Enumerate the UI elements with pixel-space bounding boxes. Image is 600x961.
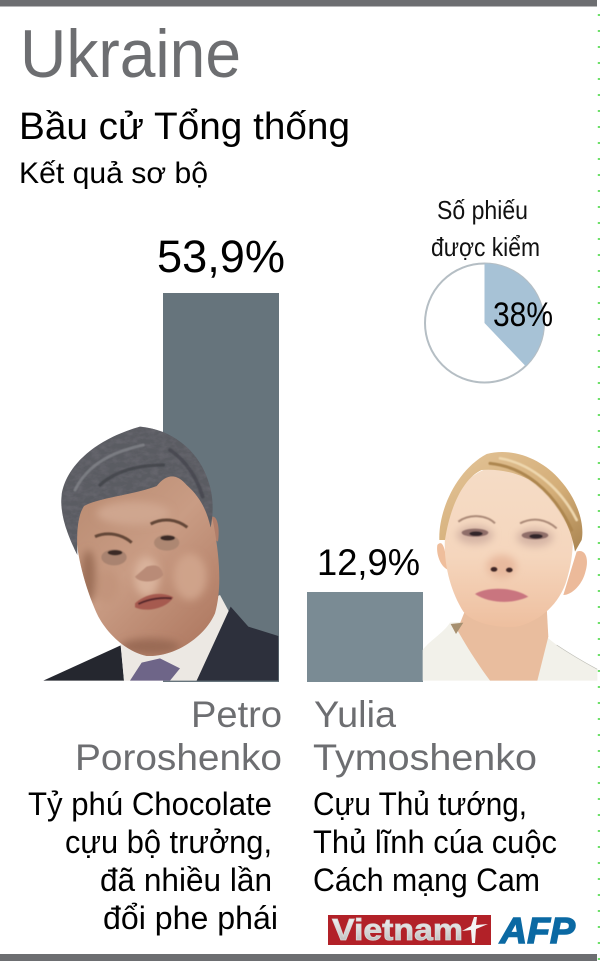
portrait: Petro Poroshenko [43,427,278,681]
name: Yulia Tymoshenko [313,694,537,778]
name: Petro Poroshenko: Poroshenko [75,737,282,778]
pie heading: Số phiếu [437,195,528,225]
description: Tymoshenko: Cách mạng Cam [313,862,540,898]
dotted right edge [598,14,600,961]
logo: Vietnam+: Vietnam [332,912,463,947]
value: Tymoshenko: 12,9% [317,542,420,583]
bar: Poroshenko [163,293,279,682]
description: Poroshenko [28,786,278,936]
description: Tymoshenko: Cựu Thủ tướng, [313,786,527,822]
pie chart: votes counted [425,264,553,382]
pie chart: votes counted: 38% [493,296,553,334]
portrait: Yulia Tymoshenko [423,452,597,681]
bottom bar [0,954,597,961]
pie heading [431,195,540,262]
name: Yulia Tymoshenko: Tymoshenko [313,737,537,778]
logo: AFP: AFP [499,910,576,951]
description: Tymoshenko [313,786,557,898]
subtitle: Bầu cử Tổng thống [19,106,350,148]
name: Yulia Tymoshenko: Yulia [314,694,396,735]
value: Poroshenko: 53,9% [157,231,285,282]
description: Poroshenko: cựu bộ trưởng, [65,824,272,860]
bar: Tymoshenko [307,592,423,682]
pie heading: được kiểm [431,232,540,262]
subheading: Kết quả sơ bộ [19,157,208,190]
name: Petro Poroshenko: Petro [191,694,282,735]
description: Poroshenko: Tỷ phú Chocolate [28,786,272,822]
description: Poroshenko: đã nhiều lần [100,862,272,898]
title: Ukraine [20,16,241,92]
description: Tymoshenko: Thủ lĩnh cúa cuộc [313,824,557,860]
description: Poroshenko: đổi phe phái [103,900,278,936]
top bar [0,0,597,6]
name: Petro Poroshenko [75,694,282,778]
